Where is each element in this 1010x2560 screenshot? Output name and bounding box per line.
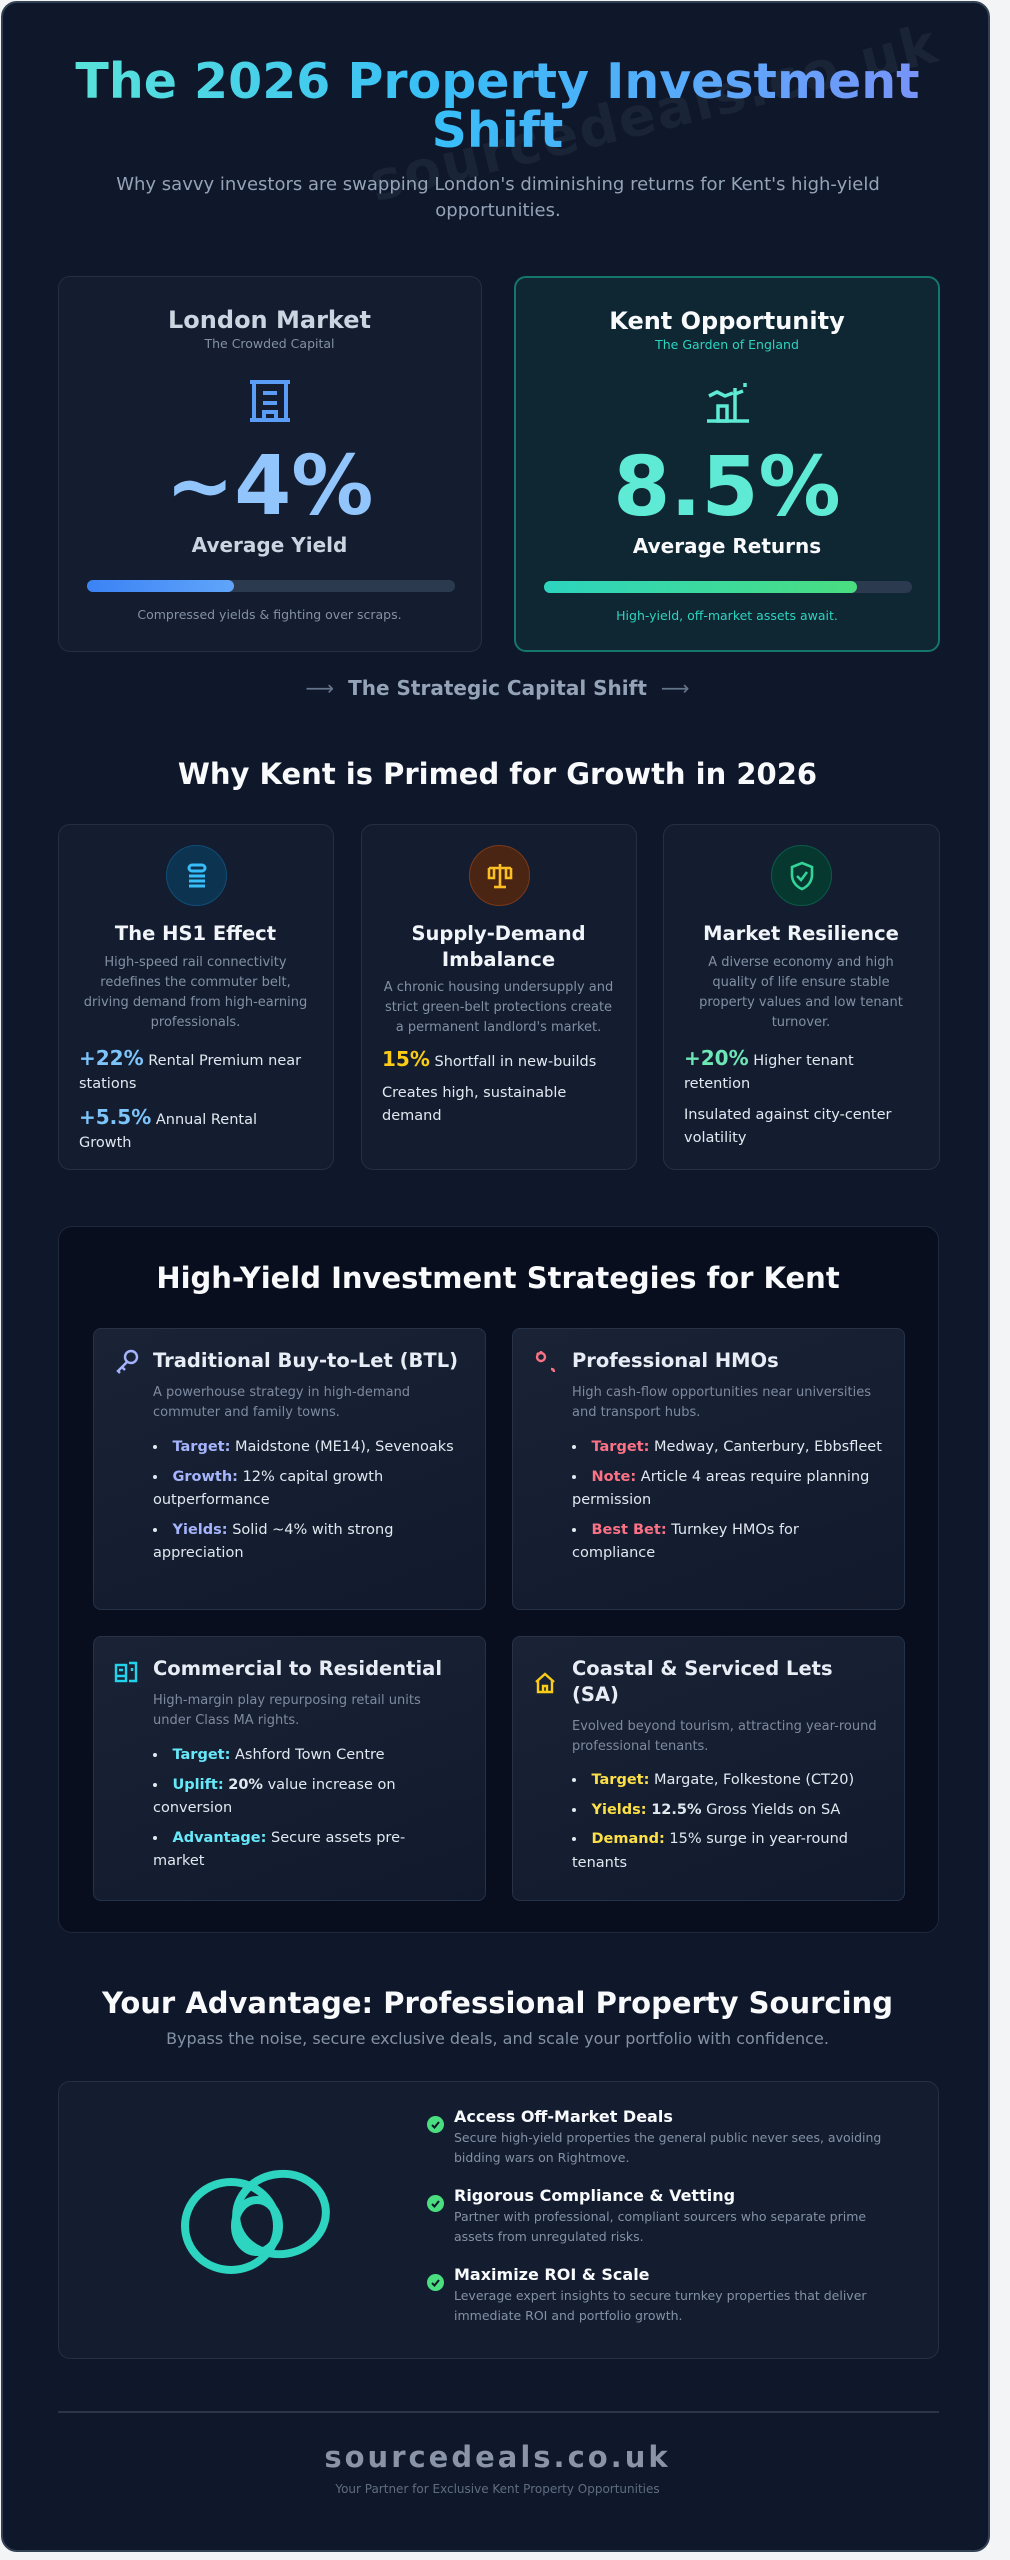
BTL bullets: Yields: Solid ~4% with strong appreciation [153, 1522, 393, 1561]
supply title [411, 922, 586, 971]
title: The 2026 Property Investment [75, 53, 920, 110]
panel: HS1 effect [58, 824, 334, 1170]
supply title: Supply-Demand [411, 922, 586, 945]
commercial bullets: Target: Ashford Town Centre [172, 1747, 385, 1763]
strategies heading: High-Yield Investment Strategies for Kent [156, 1261, 840, 1295]
BTL desc: A powerhouse strategy in high-demand commuter and family towns. [153, 1385, 410, 1420]
Kent caption: High-yield, off-market assets await. [616, 608, 838, 623]
commercial desc: High-margin play repurposing retail units under Class MA rights. [153, 1693, 421, 1728]
footer tagline: Your Partner for Exclusive Kent Property Opportunities [335, 2482, 660, 2496]
item: ROI: Maximize ROI & Scale [454, 2265, 650, 2284]
panel: market resilience [663, 824, 940, 1170]
item: ROI: Leverage expert insights to secure turnkey properties that deliver immediate ROI and portfolio growth. [454, 2288, 867, 2322]
bar: London [87, 580, 455, 592]
resilience stats: +20% Higher tenant retention Insulated against city-center volatility [684, 1046, 891, 1146]
coastal desc: Evolved beyond tourism, attracting year-round professional tenants. [572, 1719, 877, 1754]
BTL title: Traditional Buy-to-Let (BTL) [153, 1349, 458, 1372]
BTL bullets: Target: Maidstone (ME14), Sevenoaks [172, 1439, 454, 1455]
item: compliance: Rigorous Compliance & Vetting [454, 2186, 735, 2205]
panel: advantage [58, 2081, 939, 2359]
coastal bullets: Yields: 12.5% Gross Yields on SA [592, 1802, 840, 1818]
HMO bullets [572, 1439, 882, 1561]
heading: your advantage: Your Advantage: Professional Property Sourcing [102, 1986, 893, 2020]
icon: logo rings [181, 2170, 330, 2274]
heading: why Kent: Why Kent is Primed for Growth in 2026 [178, 757, 817, 791]
supply stats: 15% Shortfall in new-builds Creates high, sustainable demand [382, 1047, 596, 1124]
HMO bullets: Best Bet: Turnkey HMOs for compliance [572, 1522, 799, 1561]
supply desc: A chronic housing undersupply and strict green-belt protections create a permanent landlord's market. [384, 980, 613, 1035]
strategy: coastal SA [512, 1636, 905, 1901]
icon: growth town [707, 383, 749, 423]
item: compliance [427, 2186, 866, 2244]
coastal bullets [572, 1772, 854, 1870]
icon: house [535, 1672, 555, 1694]
HS1 title: The HS1 Effect [115, 922, 276, 945]
commercial bullets: Uplift: 20% value increase on conversion [153, 1776, 396, 1816]
resilience desc: A diverse economy and high quality of life ensure stable property values and low tenant turnover. [699, 955, 903, 1030]
checklist [427, 2107, 881, 2322]
item: off-market: Secure high-yield properties the general public never sees, avoiding bidding wars on Rightmove. [454, 2130, 881, 2164]
icon: key [116, 1350, 138, 1374]
Kent label: Average Returns [633, 534, 821, 558]
icon: shield [771, 845, 832, 906]
London caption: Compressed yields & fighting over scraps. [137, 607, 402, 622]
London subtitle: The Crowded Capital [204, 336, 335, 351]
item: compliance: Partner with professional, compliant sourcers who separate prime assets from unregulated risks. [454, 2209, 866, 2244]
title: Shift [432, 102, 563, 159]
HMO bullets: Target: Medway, Canterbury, Ebbsfleet [592, 1439, 882, 1455]
icon: train [166, 845, 227, 906]
item: ROI [427, 2265, 867, 2322]
bar: Kent [544, 581, 912, 593]
supply title: Imbalance [442, 948, 555, 971]
panel: supply-demand [361, 824, 637, 1170]
HMO title: Professional HMOs [572, 1349, 779, 1372]
HS1 desc: High-speed rail connectivity redefines the commuter belt, driving demand from high-earning professionals. [84, 955, 307, 1030]
panel: London market [58, 276, 482, 652]
arrow: strategic capital shift: ⟶ The Strategic Capital Shift ⟶ [305, 676, 690, 700]
icon: building [250, 380, 290, 422]
strategy: HMOs [512, 1328, 905, 1610]
coastal bullets: Demand: 15% surge in year-round tenants [572, 1831, 848, 1870]
London big number: ~4% [166, 439, 373, 534]
icon: scales [469, 845, 530, 906]
strategy: commercial to residential [93, 1636, 486, 1901]
Kent subtitle: The Garden of England [655, 337, 799, 352]
commercial bullets: Advantage: Secure assets pre-market [153, 1830, 405, 1869]
item: off-market: Access Off-Market Deals [454, 2107, 673, 2126]
Kent heading: Kent Opportunity [609, 307, 845, 335]
watermark: sourcedeals.co.uk [363, 12, 945, 214]
item: off-market [427, 2107, 881, 2164]
advantage subtitle: Bypass the noise, secure exclusive deals, and scale your portfolio with confidence. [166, 2029, 829, 2048]
title [3, 57, 992, 155]
panel: Kent opportunity [514, 276, 940, 652]
coastal title: Coastal & Serviced Lets (SA) [572, 1657, 833, 1706]
panel: strategies [58, 1226, 939, 1933]
HMO bullets: Note: Article 4 areas require planning permission [572, 1468, 869, 1508]
BTL bullets: Growth: 12% capital growth outperformance [153, 1468, 383, 1508]
icon: people [536, 1351, 556, 1372]
Kent big number: 8.5% [613, 440, 841, 535]
strategy: BTL [93, 1328, 486, 1610]
commercial bullets [153, 1747, 405, 1869]
HMO desc: High cash-flow opportunities near universities and transport hubs. [572, 1385, 871, 1420]
resilience title: Market Resilience [703, 922, 899, 945]
BTL bullets [153, 1439, 454, 1561]
subtitle: Why savvy investors are swapping London's diminishing returns for Kent's high-yield opportunities. [116, 174, 880, 221]
London label: Average Yield [192, 533, 347, 557]
coastal bullets: Target: Margate, Folkestone (CT20) [592, 1772, 854, 1788]
HS1 stats: +22% Rental Premium near stations +5.5% Annual Rental Growth [79, 1046, 301, 1151]
footer brand: sourcedeals.co.uk [324, 2440, 671, 2474]
commercial title: Commercial to Residential [153, 1657, 442, 1680]
icon: building conversion [114, 1662, 138, 1682]
London heading: London Market [168, 306, 371, 334]
